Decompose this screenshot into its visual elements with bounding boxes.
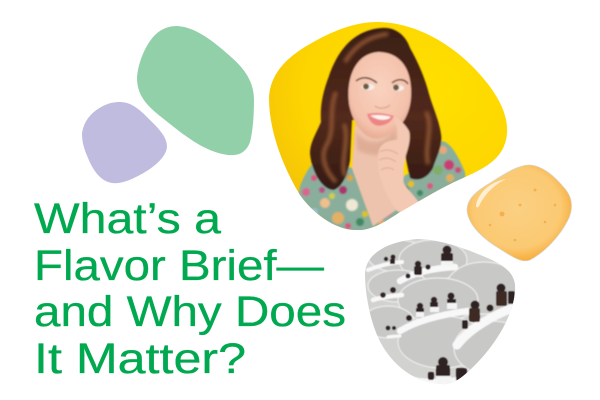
title: It Matter? bbox=[34, 335, 246, 383]
title: and Why Does bbox=[34, 288, 346, 336]
bottles bbox=[380, 246, 515, 381]
dress flowers bbox=[302, 146, 461, 229]
green blob bbox=[137, 26, 254, 155]
honey droplet bbox=[467, 165, 572, 261]
hair bbox=[310, 28, 441, 190]
yellow background bbox=[269, 22, 508, 230]
face bbox=[348, 52, 411, 139]
highlight bbox=[476, 179, 506, 207]
shelf discs bbox=[367, 240, 515, 370]
title bbox=[34, 195, 346, 383]
eyes bbox=[362, 84, 374, 90]
dress bbox=[298, 140, 466, 230]
white shelves bbox=[368, 262, 518, 382]
neck and chest bbox=[352, 125, 404, 226]
title: Flavor Brief— bbox=[34, 242, 324, 290]
neck shadow bbox=[356, 128, 398, 155]
bottle labels bbox=[415, 261, 457, 383]
bubbles bbox=[489, 188, 556, 241]
nose bbox=[375, 105, 390, 108]
finger lines bbox=[379, 150, 398, 170]
purple blob bbox=[82, 102, 167, 183]
lips bbox=[367, 113, 394, 126]
hair highlights bbox=[324, 34, 429, 182]
photo: amber bottles on spiral shelves bbox=[365, 239, 516, 384]
hand bbox=[378, 117, 420, 213]
title: What’s a bbox=[34, 195, 221, 243]
photo: woman on yellow blob bbox=[269, 22, 508, 230]
eyebrows bbox=[356, 78, 408, 84]
